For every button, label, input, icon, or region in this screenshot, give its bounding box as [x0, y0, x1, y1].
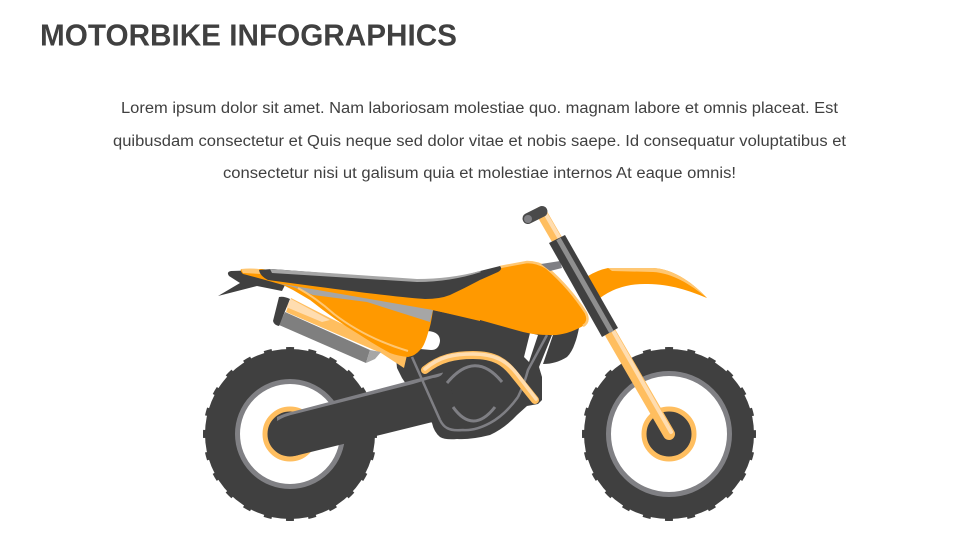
grey band	[277, 283, 433, 322]
description text: quibusdam consectetur et Quis neque sed dolor vitae et nobis saepe. Id consequatur voluptatibus et	[113, 133, 847, 150]
engine cover upper arc	[447, 366, 502, 383]
white cutout	[420, 331, 440, 350]
radiator shroud	[543, 328, 579, 364]
frame line over swingarm	[412, 357, 440, 420]
front fender	[588, 268, 707, 298]
fork upper sleeve	[549, 235, 618, 337]
seat	[259, 266, 501, 299]
rear wheel	[204, 348, 376, 520]
lower fork	[611, 332, 671, 434]
exhaust muffler	[273, 297, 407, 368]
title: MOTORBIKE INFOGRAPHICS	[40, 18, 457, 52]
rear tail	[218, 270, 285, 296]
frame line	[440, 335, 547, 430]
engine and frame	[396, 308, 579, 439]
tank	[432, 262, 587, 335]
motorbike illustration	[204, 210, 754, 520]
description text	[113, 100, 847, 182]
description text: consectetur nisi ut galisum quia et molestiae internos At eaque omnis!	[223, 165, 736, 182]
connector to fork	[541, 261, 562, 271]
frame gap	[524, 333, 538, 362]
swingarm	[277, 372, 443, 434]
side panel	[241, 268, 480, 357]
handlebar grip	[524, 212, 542, 223]
front wheel	[584, 348, 754, 520]
description text: Lorem ipsum dolor sit amet. Nam laboriosam molestiae quo. magnam labore et omnis placeat. Est	[121, 100, 839, 117]
engine lower arc	[453, 407, 495, 421]
curved pipe	[425, 354, 536, 400]
upper fork tube	[541, 210, 562, 243]
panel highlight	[298, 288, 408, 351]
